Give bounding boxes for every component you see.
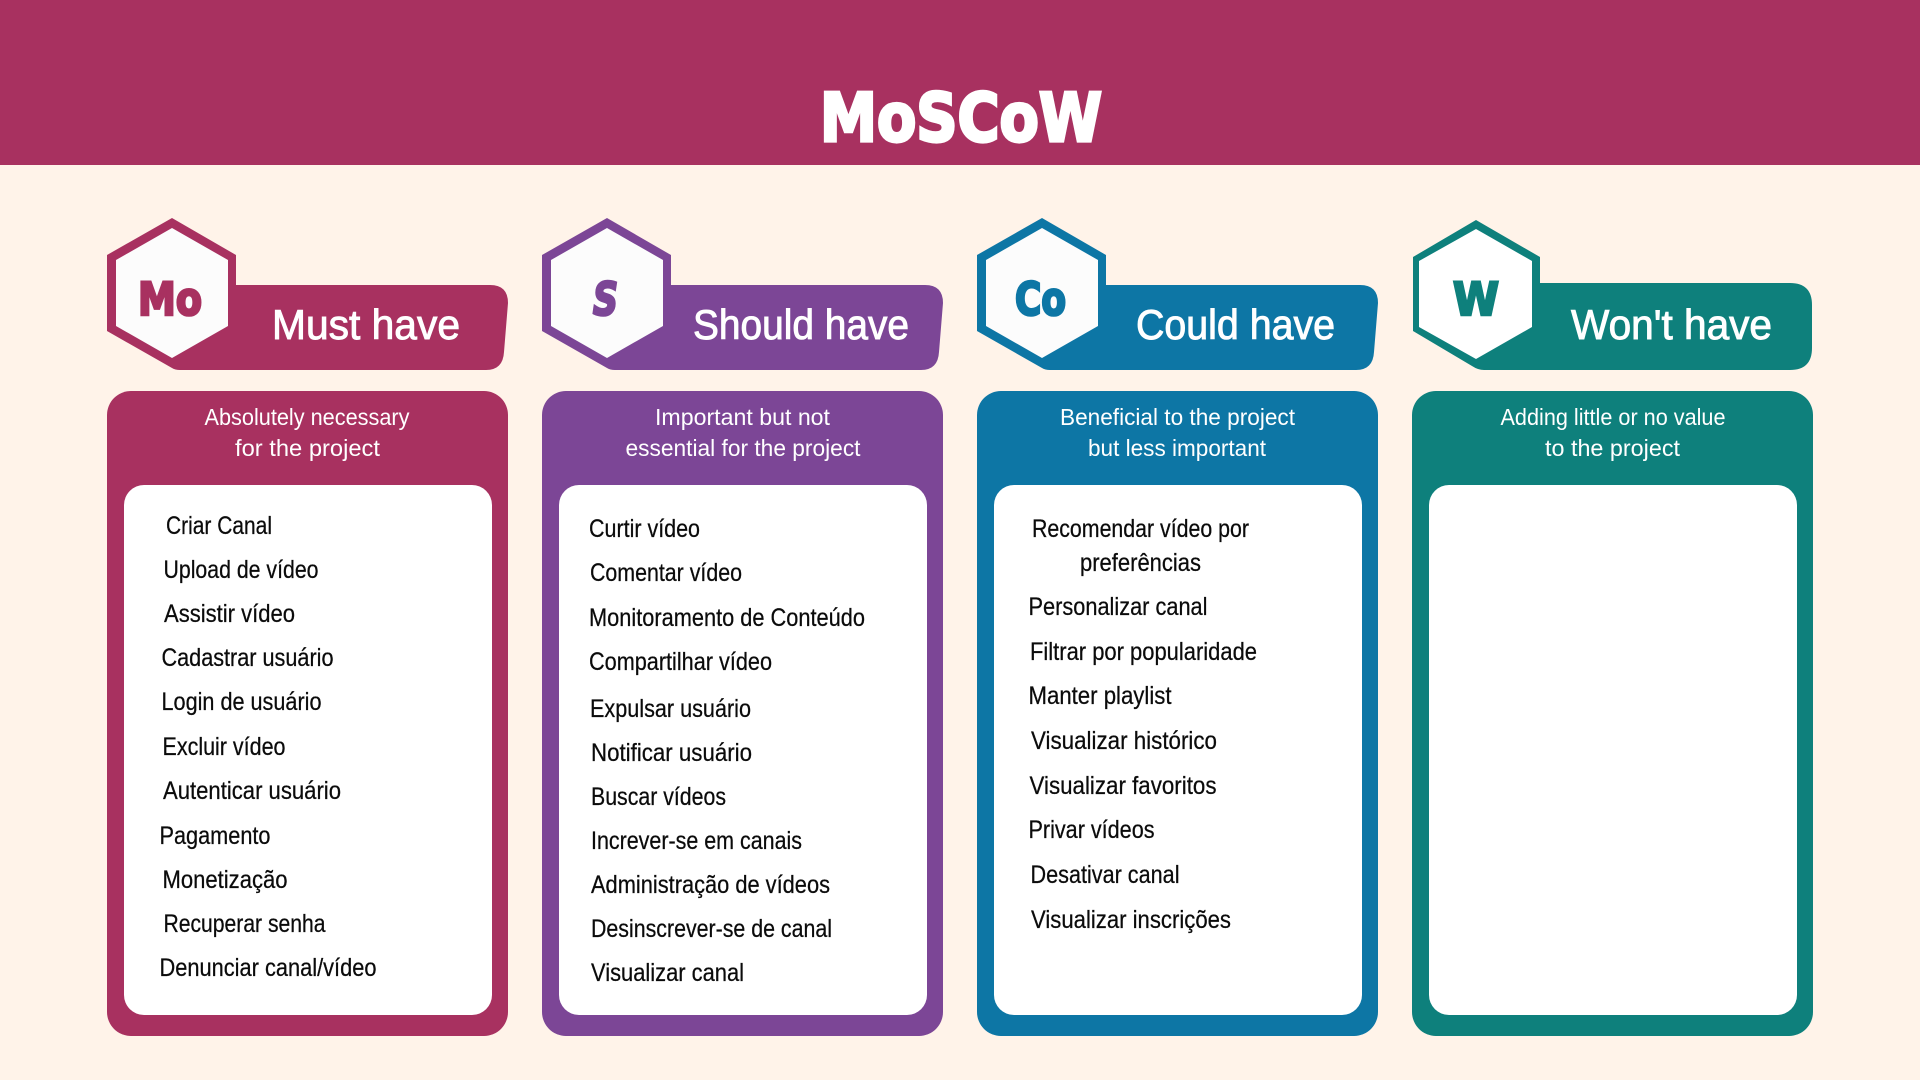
header ribbon: must have (107, 218, 508, 370)
description: should have: essential for the project (626, 435, 861, 461)
icon: hexagon badge S (551, 228, 663, 358)
list: must have items (124, 485, 492, 1015)
title: MoSCoW (820, 79, 1102, 157)
list: should have items: Notificar usuário (591, 739, 752, 767)
panel: won't have (1412, 391, 1813, 1036)
list: won't have empty box (1429, 485, 1797, 1015)
panel: could have (977, 391, 1378, 1036)
header ribbon: could have (977, 218, 1378, 370)
icon: hexagon badge Mo: Mo (138, 273, 202, 326)
list: could have items (994, 485, 1362, 1015)
list: could have items: Personalizar canal (1028, 593, 1208, 621)
panel: should have (542, 391, 943, 1036)
list: must have items: Monetização (162, 866, 288, 894)
list: could have items: Visualizar histórico (1031, 727, 1217, 755)
list: should have items: Buscar vídeos (591, 783, 726, 811)
description: must have: Absolutely necessary (204, 404, 410, 430)
list: must have items: Assistir vídeo (164, 600, 295, 628)
description: won't have (1500, 404, 1726, 461)
heading: must have: Must have (272, 301, 460, 348)
list: must have items: Excluir vídeo (162, 733, 286, 761)
icon: hexagon badge Co (986, 228, 1098, 358)
list: could have items: Desativar canal (1030, 861, 1180, 889)
list: should have items: Monitoramento de Conteúdo (589, 604, 865, 632)
header ribbon: won't have (1413, 220, 1812, 370)
list: could have items: Visualizar inscrições (1031, 906, 1231, 934)
list: should have items: Increver-se em canais (591, 827, 802, 855)
column: must have (107, 218, 508, 1036)
description: could have: but less important (1088, 435, 1267, 461)
list: could have items: Filtrar por popularidade (1030, 638, 1257, 666)
heading: should have: Should have (693, 301, 909, 348)
list: should have items: Curtir vídeo (589, 515, 700, 543)
list: must have items: Cadastrar usuário (162, 644, 334, 672)
icon: hexagon badge S: S (593, 273, 618, 326)
list: could have items: Privar vídeos (1028, 816, 1154, 844)
list: could have items: Visualizar favoritos (1030, 772, 1216, 800)
heading: could have: Could have (1136, 301, 1335, 348)
description: won't have: Adding little or no value (1500, 404, 1726, 430)
description: could have: Beneficial to the project (1060, 404, 1296, 430)
list: should have items: Desinscrever-se de canal (591, 915, 832, 943)
list: should have items (559, 485, 927, 1015)
icon: hexagon badge Co: Co (1015, 273, 1066, 326)
description: should have (626, 404, 861, 461)
description: should have: Important but not (655, 404, 831, 430)
list: could have items: Recomendar vídeo por (1032, 515, 1249, 543)
list: must have items: Recuperar senha (164, 910, 326, 938)
list: must have items: Login de usuário (162, 688, 322, 716)
list: should have items: Expulsar usuário (590, 695, 751, 723)
description: must have (204, 404, 410, 461)
description: won't have: to the project (1545, 435, 1681, 461)
panel: must have (107, 391, 508, 1036)
description: must have: for the project (235, 435, 381, 461)
description: could have (1060, 404, 1296, 461)
list: should have items: Visualizar canal (591, 959, 744, 987)
list: must have items: Upload de vídeo (164, 556, 318, 584)
icon: hexagon badge W: W (1453, 273, 1499, 326)
icon: hexagon badge Mo (116, 228, 228, 358)
list: should have items: Comentar vídeo (590, 559, 742, 587)
list: must have items: Autenticar usuário (163, 777, 341, 805)
icon: hexagon badge W (1419, 229, 1532, 359)
column: won't have (1412, 220, 1813, 1036)
column: could have (977, 218, 1378, 1036)
title banner (0, 0, 1920, 165)
list: must have items: Denunciar canal/vídeo (160, 954, 376, 982)
list: should have items: Administração de vídeos (591, 871, 830, 899)
list: should have items: Compartilhar vídeo (589, 648, 772, 676)
list: could have items: Manter playlist (1028, 682, 1172, 710)
heading: won't have: Won't have (1571, 301, 1772, 348)
list: could have items: preferências (1080, 549, 1201, 577)
list: must have items: Criar Canal (166, 512, 272, 540)
header ribbon: should have (542, 218, 943, 370)
column: should have (542, 218, 943, 1036)
list: must have items: Pagamento (160, 822, 270, 850)
